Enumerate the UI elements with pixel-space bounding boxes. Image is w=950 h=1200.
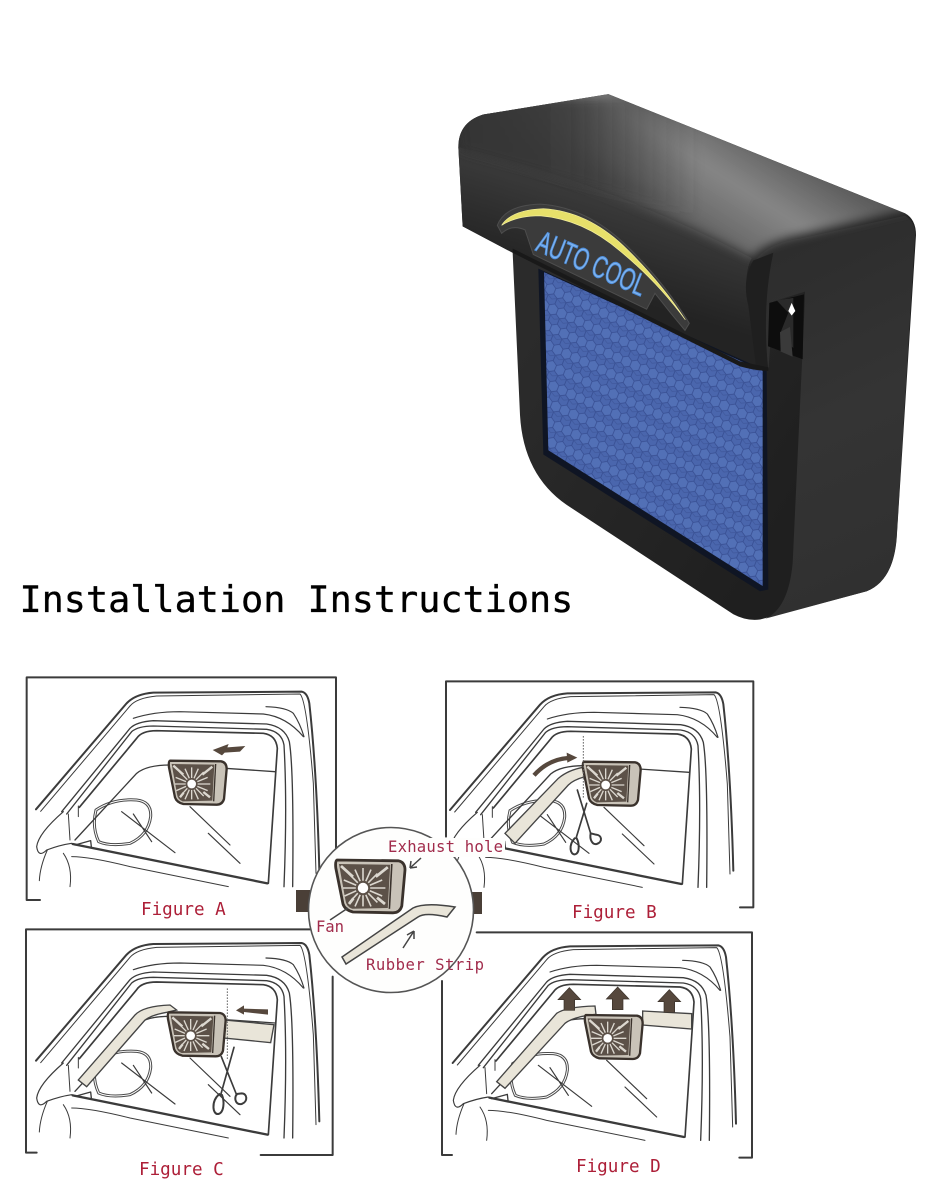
circle outline [308, 828, 474, 992]
figure D arrow 3 [658, 990, 681, 1012]
Figure C [26, 929, 333, 1155]
side switch slot [768, 294, 804, 359]
label fan: Fan [316, 918, 344, 936]
parts callout circle [308, 828, 505, 992]
callout rubber strip [342, 905, 455, 964]
figure C arrow [236, 1005, 268, 1015]
Figure A [27, 677, 336, 900]
figure B scissors [576, 790, 591, 838]
product photo: solar car vent fan [453, 87, 920, 620]
yellow arc [502, 209, 685, 320]
exhaust label background [385, 838, 505, 857]
figure B vent [583, 762, 641, 806]
figure A frame [27, 677, 336, 900]
device body silhouette [458, 94, 916, 620]
figure D left rubber strip [497, 1006, 596, 1088]
caption Figure C: Figure C [139, 1160, 224, 1180]
figure D right rubber strip [643, 1011, 692, 1029]
side face [753, 216, 915, 619]
hood corner [746, 253, 773, 371]
strip arrow [403, 931, 414, 948]
figure D arrow 2 [606, 987, 629, 1010]
hood lower lip [513, 249, 768, 371]
logo badge [497, 204, 689, 330]
Figure B [446, 681, 753, 907]
left connector block [296, 890, 310, 912]
figure D arrow 1 [558, 988, 581, 1010]
figure C frame [26, 929, 333, 1155]
figure A arrow [213, 744, 245, 755]
figure C scissors [221, 1047, 237, 1095]
right connector block [472, 892, 482, 914]
caption Figure B: Figure B [572, 903, 657, 923]
figure B curved arrow [534, 758, 568, 775]
figure C right rubber strip [224, 1020, 274, 1043]
figure B frame [446, 681, 753, 907]
panel recess [538, 269, 768, 591]
logo wordmark: AUTO COOL [532, 225, 651, 303]
front hood [458, 147, 768, 370]
label exhaust hole: Exhaust hole [388, 838, 503, 856]
callout vent [336, 860, 405, 913]
figure C vent [168, 1012, 226, 1056]
figure B rubber strip [505, 767, 585, 843]
top face [453, 87, 920, 258]
figure D vent [585, 1015, 643, 1059]
caption Figure D: Figure D [576, 1157, 661, 1177]
solar panel [544, 272, 763, 586]
Figure D [442, 932, 752, 1158]
caption Figure A: Figure A [141, 900, 226, 920]
figure C cut line [226, 988, 229, 1060]
figure B door drawing [450, 692, 733, 887]
figure C door drawing [36, 943, 319, 1138]
figure D door drawing [453, 945, 736, 1140]
title: Installation Instructions [20, 578, 573, 621]
figure C left rubber strip [78, 1005, 177, 1087]
fan leader line [330, 908, 348, 920]
exhaust arrow [410, 858, 421, 868]
figure D frame [442, 932, 752, 1158]
figure A vent [169, 761, 227, 805]
label rubber strip: Rubber Strip [366, 956, 484, 974]
figure A door drawing [36, 692, 319, 887]
figure B cut line [582, 736, 585, 798]
